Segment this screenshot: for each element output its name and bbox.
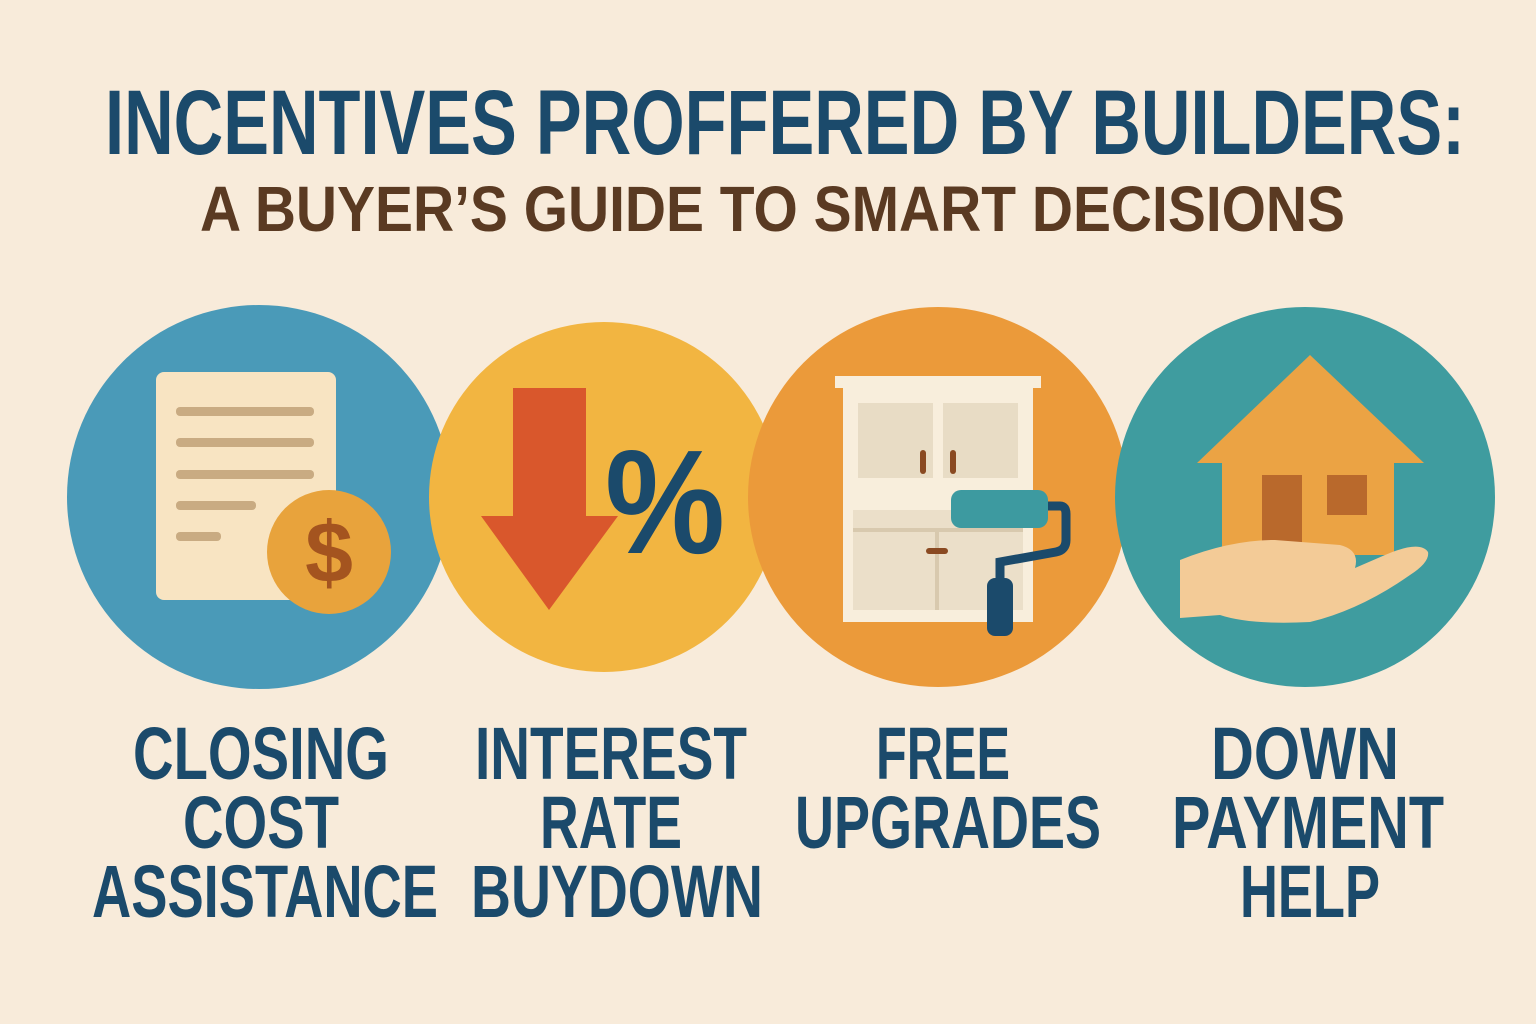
icon: percent: %: [605, 420, 725, 585]
panel: down payment circle: [1115, 307, 1495, 687]
label: closing cost assistance: CLOSING: [133, 712, 389, 795]
label: down payment help: HELP: [1240, 850, 1380, 933]
icon: document: [156, 372, 336, 600]
label: free upgrades: [795, 712, 1101, 864]
label: interest rate buydown: [471, 712, 763, 933]
icon: dollar coin: [267, 490, 391, 614]
icon: cabinet: [835, 376, 1041, 622]
label: closing cost assistance: ASSISTANCE: [92, 850, 438, 933]
icon: down arrow: [481, 388, 618, 610]
label: down payment help: PAYMENT: [1172, 781, 1444, 864]
label: down payment help: [1172, 712, 1444, 933]
label: closing cost assistance: [92, 712, 438, 933]
label: interest rate buydown: INTEREST: [475, 712, 747, 795]
label: free upgrades: UPGRADES: [795, 781, 1101, 864]
label: interest rate buydown: RATE: [540, 781, 682, 864]
panel: closing cost circle: [67, 305, 451, 689]
label: free upgrades: FREE: [876, 712, 1010, 795]
panel: interest rate circle: [429, 322, 779, 672]
icon: dollar coin: $: [305, 505, 353, 601]
icon: hand: [1180, 540, 1428, 623]
icon: house: [1197, 355, 1424, 555]
icon: paint roller: [951, 490, 1066, 636]
subtitle: A BUYER’S GUIDE TO SMART DECISIONS: [200, 173, 1345, 245]
label: interest rate buydown: BUYDOWN: [471, 850, 763, 933]
label: closing cost assistance: COST: [183, 781, 339, 864]
label: down payment help: DOWN: [1211, 712, 1399, 795]
panel: free upgrades circle: [748, 307, 1128, 687]
